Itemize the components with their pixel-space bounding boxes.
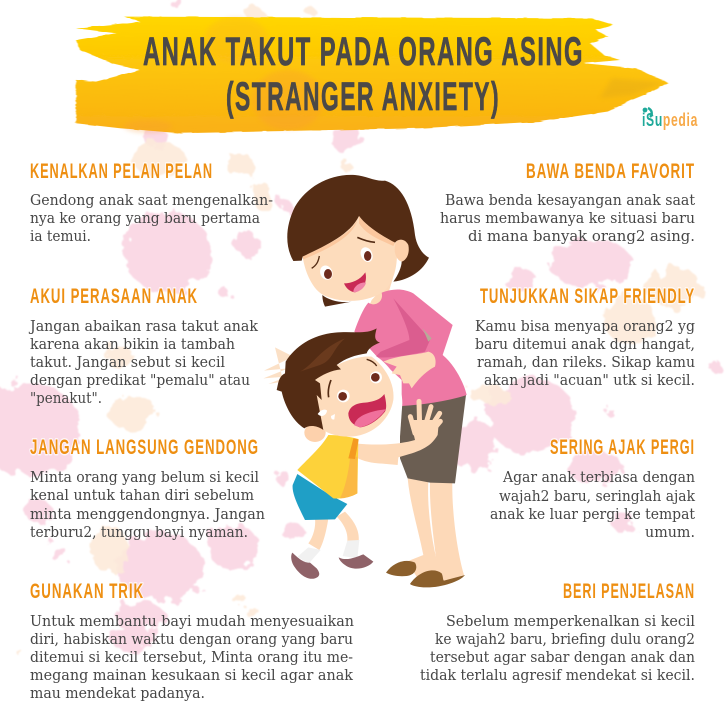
panel: gunakan trik: megang mainan kesukaan si kecil agar anak: [30, 666, 354, 684]
panel: sering ajak pergi: anak ke luar pergi ke tempat: [490, 505, 695, 523]
panel: tunjukkan sikap friendly: baru ditemui anak dgn hangat,: [475, 335, 695, 353]
boy's legs and socks: [298, 512, 359, 564]
panel: sering ajak pergi: Agar anak terbiasa dengan: [502, 468, 695, 486]
panel: kenalkan pelan pelan: [30, 160, 273, 245]
panel: jangan langsung gendong: terburu2, tunggu bayi nyaman.: [30, 523, 248, 541]
boy's fear lines: [263, 347, 293, 384]
panel: bawa benda favorit: di mana banyak orang2 asing.: [468, 227, 695, 245]
title brush stroke: [76, 17, 668, 133]
panel: kenalkan pelan pelan: Gendong anak saat mengenalkan-: [30, 191, 273, 209]
panel: jangan langsung gendong: JANGAN LANGSUNG GENDONG: [30, 436, 259, 459]
mother's neck: [370, 277, 393, 306]
panel: jangan langsung gendong: Minta orang yang belum si kecil: [30, 468, 259, 486]
boy's shirt: [297, 435, 358, 498]
logo: iSupedia: iSupedia: [642, 110, 698, 130]
panel: gunakan trik: ditemui si kecil tersebut, Minta orang itu me-: [30, 648, 353, 666]
boy's shorts: [293, 474, 347, 520]
panel: gunakan trik: diri, habiskan waktu dengan orang yang baru: [30, 630, 353, 648]
panel: bawa benda favorit: [440, 160, 695, 245]
panel: sering ajak pergi: umum.: [645, 523, 695, 541]
panel: gunakan trik: GUNAKAN TRIK: [30, 580, 144, 603]
panel: tunjukkan sikap friendly: akan jadi "acuan" utk si kecil.: [484, 371, 695, 389]
panel: akui perasaan anak: dengan predikat "pemalu" atau: [30, 371, 250, 389]
mother's shirt: [354, 289, 467, 406]
panel: bawa benda favorit: harus membawanya ke situasi baru: [440, 209, 695, 227]
mother's skirt: [400, 395, 466, 483]
panel: beri penjelasan: Sebelum memperkenalkan si kecil: [446, 612, 695, 630]
panel: kenalkan pelan pelan: nya ke orang yang baru pertama: [30, 209, 260, 227]
boy's arm and hand: [355, 401, 440, 465]
panel: akui perasaan anak: takut. Jangan sebut si kecil: [30, 353, 225, 371]
boy's shoes: [291, 553, 373, 579]
illustration: mother and scared child: [263, 175, 467, 587]
panel: akui perasaan anak: [28, 285, 259, 407]
mother's hand: [383, 352, 436, 388]
panel: akui perasaan anak: Jangan abaikan rasa takut anak: [28, 317, 259, 335]
panel: beri penjelasan: ke wajah2 baru, briefing dulu orang2: [435, 630, 695, 648]
panel: sering ajak pergi: [490, 436, 696, 541]
panel: akui perasaan anak: AKUI PERASAAN ANAK: [30, 285, 198, 308]
panel: gunakan trik: Untuk membantu bayi mudah menyesuaikan: [30, 612, 354, 630]
panel: beri penjelasan: [420, 580, 695, 684]
title: (STRANGER ANXIETY): [226, 75, 500, 119]
panel: sering ajak pergi: wajah2 baru, seringlah ajak: [499, 487, 696, 505]
panel: jangan langsung gendong: minta menggendongnya. Jangan: [30, 505, 265, 523]
panel: gunakan trik: [30, 580, 354, 702]
panel: tunjukkan sikap friendly: Kamu bisa menyapa orang2 yg: [475, 317, 695, 335]
panel: gunakan trik: mau mendekat padanya.: [30, 684, 205, 702]
panel: tunjukkan sikap friendly: [475, 285, 695, 389]
panel: jangan langsung gendong: [30, 436, 265, 541]
panel: beri penjelasan: tersebut agar sabar dengan anak dan: [430, 648, 695, 666]
panel: bawa benda favorit: Bawa benda kesayangan anak saat: [445, 191, 695, 209]
panel: kenalkan pelan pelan: KENALKAN PELAN PELAN: [30, 160, 213, 183]
panel: akui perasaan anak: karena akan bikin ia tambah: [30, 335, 235, 353]
panel: tunjukkan sikap friendly: ramah, dan rileks. Sikap kamu: [477, 353, 695, 371]
panel: kenalkan pelan pelan: ia temui.: [30, 227, 91, 245]
title: [143, 30, 584, 119]
boy's head: [277, 328, 402, 442]
mother's slippers: [386, 561, 465, 587]
panel: akui perasaan anak: "penakut".: [30, 389, 102, 407]
panel: jangan langsung gendong: kenal untuk tahan diri sebelum: [30, 486, 254, 504]
mother's legs: [407, 478, 464, 583]
panel: beri penjelasan: tidak terlalu agresif mendekat si kecil.: [420, 666, 695, 684]
mother's head: [287, 175, 429, 307]
